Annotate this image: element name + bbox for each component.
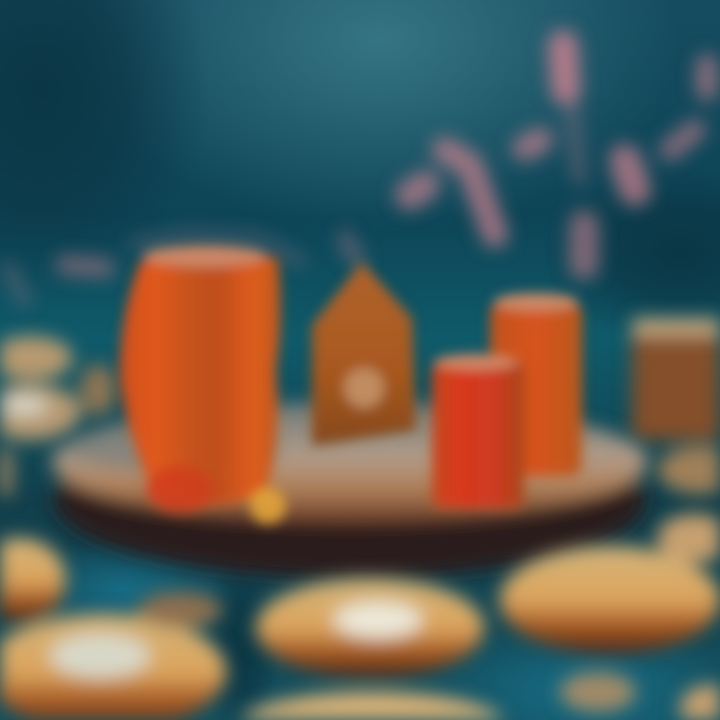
line chart: blurred pink trend line [8, 45, 707, 300]
coin stack: short red [432, 354, 524, 508]
coin stack: large orange [120, 245, 286, 524]
coins: foreground [0, 514, 720, 720]
coin stack: right background [632, 318, 720, 494]
platter [52, 402, 648, 578]
coin stack: tall orange right [490, 293, 582, 476]
coins: left background stack [0, 336, 116, 495]
icon: house [312, 262, 416, 446]
